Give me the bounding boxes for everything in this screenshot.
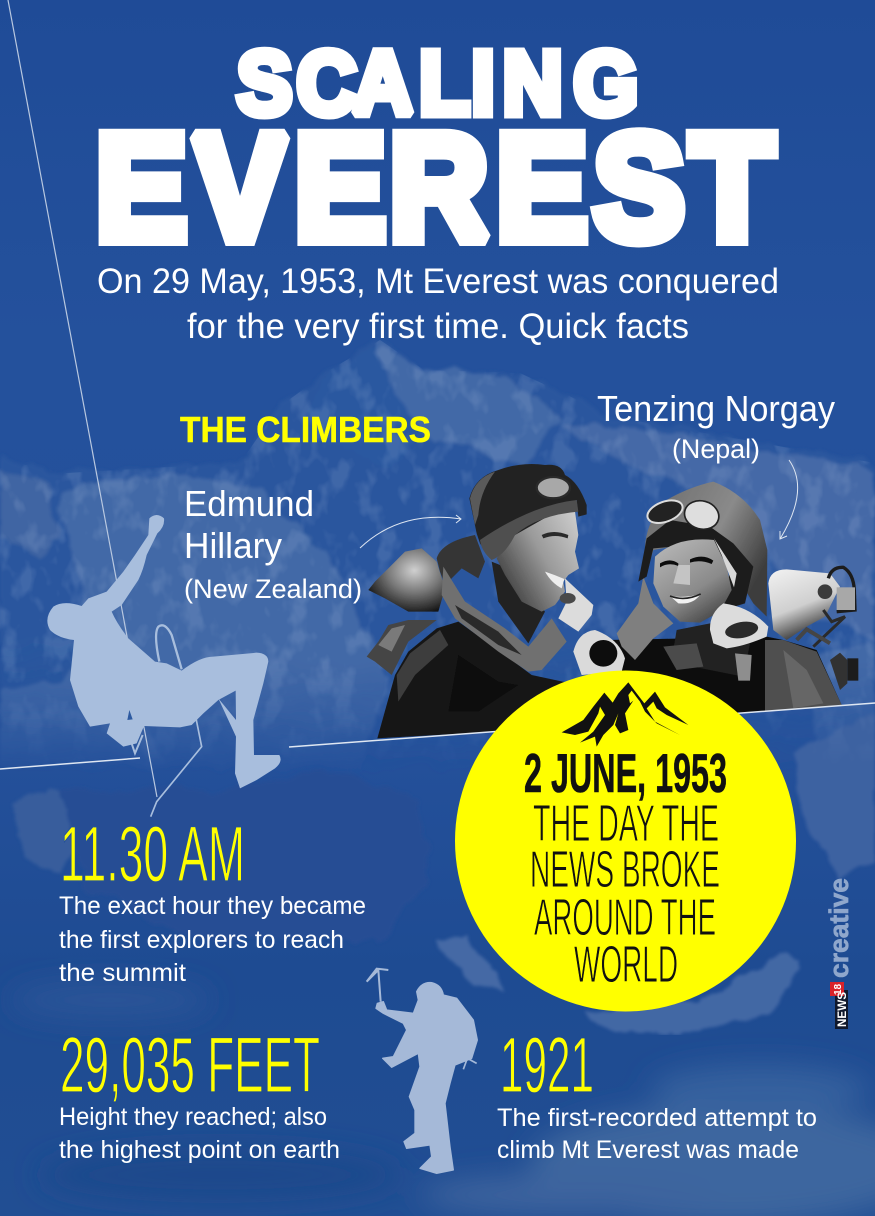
label: Tenzing Norgay: Tenzing Norgay [597,388,835,429]
arrow: to Norgay [780,460,798,539]
fact: 1921 [497,1020,817,1164]
photo: Hillary and Norgay [367,464,858,738]
Hillary figure [367,464,625,738]
callout text: 2 JUNE, 1953 [524,742,727,804]
fact: 11.30 AM: The exact hour they became [59,892,366,920]
fact: 29,035 feet: the highest point on earth [59,1136,340,1164]
callout text: NEWS BROKE [530,841,720,899]
label: Tenzing Norgay: (Nepal) [672,434,760,464]
fact: 29,035 feet [59,1020,340,1164]
fact: 29,035 feet: Height they reached; also [59,1103,327,1131]
label: Edmund Hillary: (New Zealand) [184,574,362,604]
fact: 1921: The first-recorded attempt to [497,1104,817,1132]
fact: 11.30 AM: 11.30 AM [60,809,245,898]
title: SCALING [237,34,638,134]
Norgay figure [610,482,858,713]
callout text: THE DAY THE [533,795,719,853]
logo: News18 creative: NEWS [835,992,849,1027]
heading: the climbers: THE CLIMBERS [180,409,431,450]
logo: News18 creative [824,878,854,1029]
background: mountain scene [0,340,875,1216]
arrow: to Hillary [360,515,461,548]
subtitle: for the very first time. Quick facts [187,307,689,346]
callout text: AROUND THE [534,889,716,947]
callout text: WORLD [574,936,678,994]
label: Tenzing Norgay [597,388,835,464]
subtitle [97,262,779,346]
callout text [524,742,727,994]
divider lines [0,703,875,769]
title: EVEREST [96,104,774,271]
rope [8,0,157,797]
logo: News18 creative: creative [824,878,854,978]
fact: 11.30 AM: the first explorers to reach [59,926,344,954]
callout: yellow circle [455,670,796,1012]
icon: mountaineer silhouette with ice axe [367,969,477,1173]
label: Edmund Hillary: Edmund [184,483,314,524]
fact: 1921: 1921 [500,1020,594,1109]
label: Edmund Hillary [184,483,362,604]
fact: 29,035 feet: 29,035 FEET [60,1020,320,1109]
fact: 11.30 AM: the summit [59,959,186,987]
subtitle: On 29 May, 1953, Mt Everest was conquered [97,262,779,301]
fact: 11.30 AM [59,809,366,987]
logo: News18 creative: 18 [833,983,844,995]
label: Edmund Hillary: Hillary [184,525,282,566]
fact: 1921: climb Mt Everest was made [497,1136,799,1164]
icon: mountain [562,682,688,747]
icon: abseiling climber silhouette [47,515,281,817]
